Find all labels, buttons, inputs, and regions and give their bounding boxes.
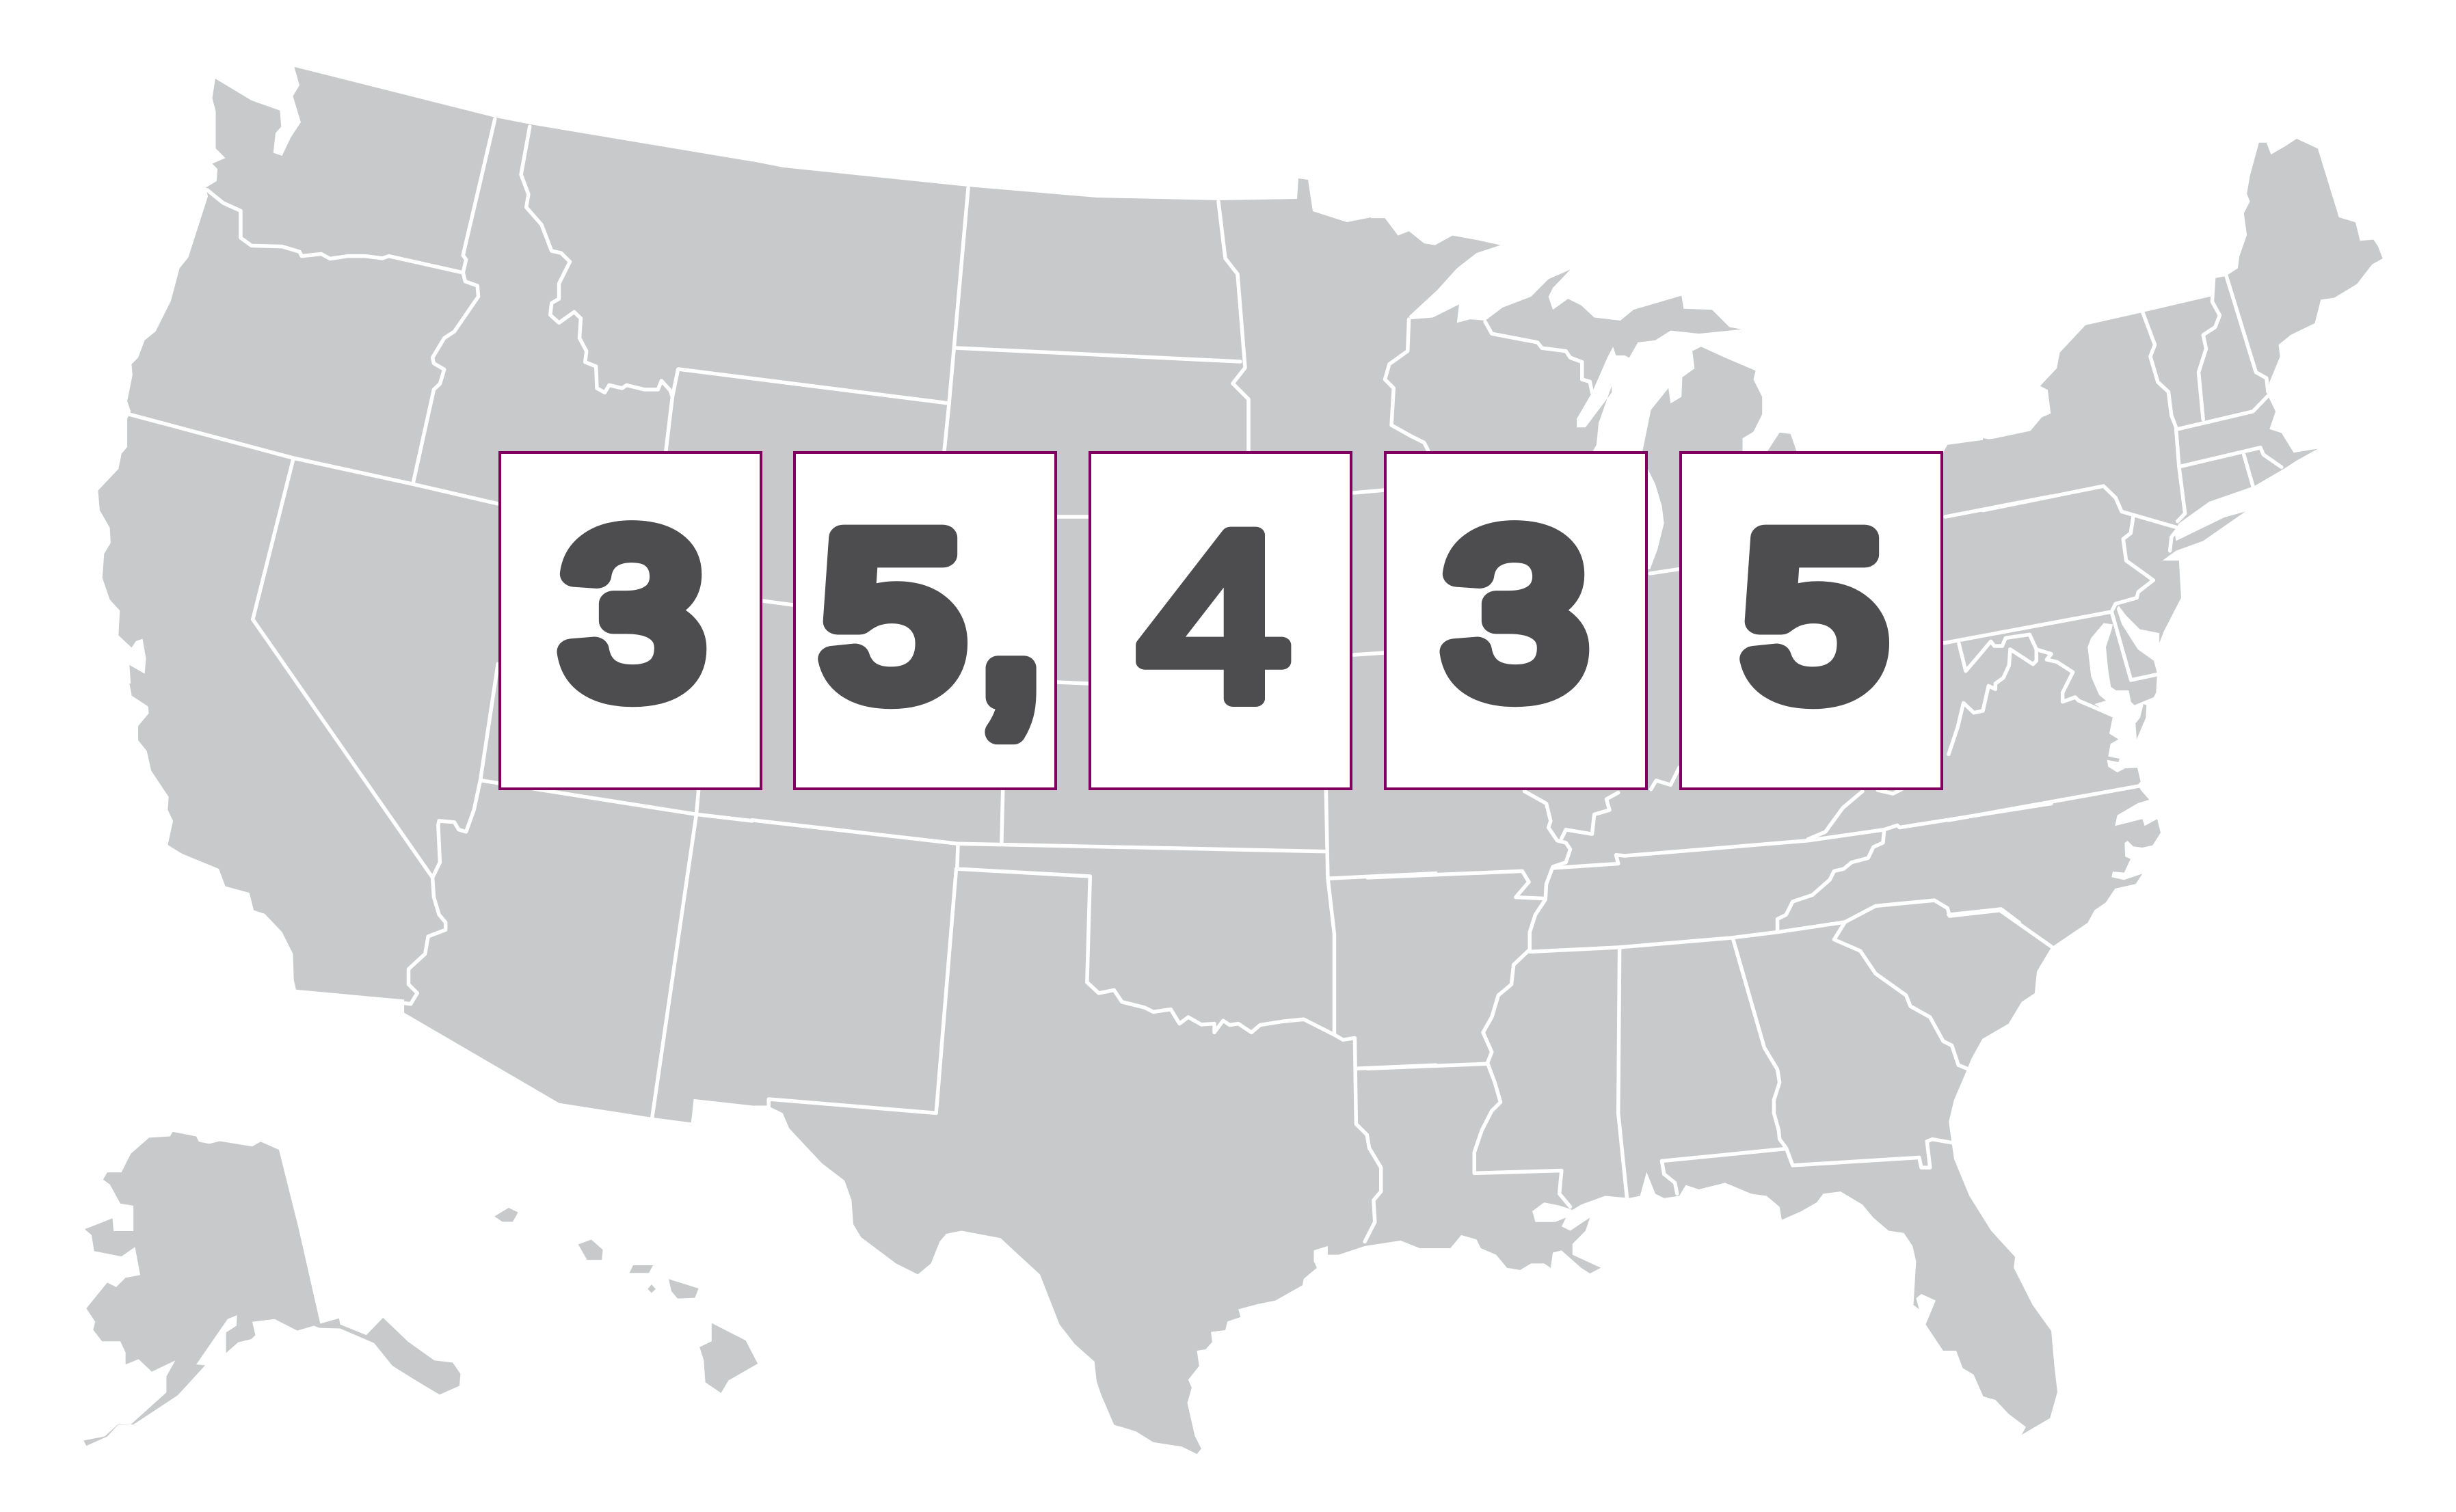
counter: digit 4	[1090, 453, 1351, 789]
counter: digit 3	[500, 453, 761, 789]
counter: digit 5 and comma: 5	[823, 489, 963, 742]
counter: digit 5	[1681, 453, 1942, 789]
counter: digit 3: 3	[1445, 487, 1586, 740]
white overlay: Lake Michigan east shore	[1646, 467, 1664, 569]
counter: digit 3	[1385, 453, 1646, 789]
map: Hawaii	[494, 1208, 758, 1393]
map: state borders	[129, 119, 2282, 1242]
map: Alaska	[83, 1132, 460, 1446]
counter: digit 5: 5	[1744, 489, 1885, 742]
counter: digit 3: 3	[562, 487, 703, 740]
counter: digit 5 and comma	[795, 450, 1056, 789]
counter: digit 5 and comma: ,	[972, 450, 1049, 755]
counter: digit 4: 4	[1139, 484, 1290, 750]
